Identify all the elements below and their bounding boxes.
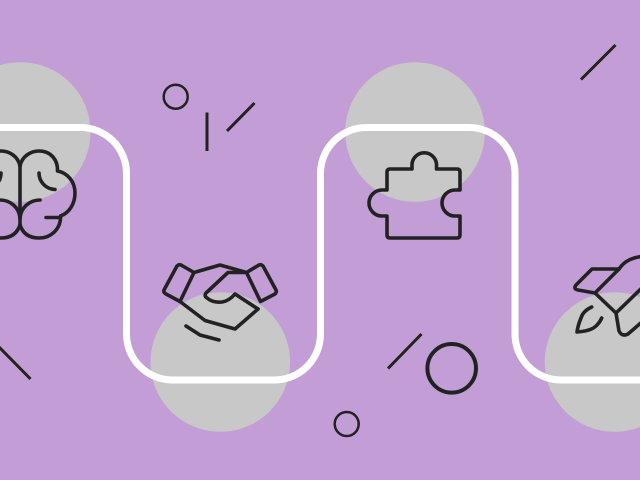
accent: large circle <box>427 344 476 393</box>
accent: vertical dash <box>206 112 208 151</box>
accent: diagonal dash centre <box>388 334 422 368</box>
icon: handshake <box>164 265 276 340</box>
icon: brain <box>0 151 75 238</box>
grey circles behind icons <box>0 62 640 432</box>
winding white path <box>0 127 640 380</box>
accent: diagonal dash top right <box>581 45 616 80</box>
accent: diagonal dash <box>227 103 254 131</box>
accent: small circle top <box>164 85 188 109</box>
accent: diagonal dash left <box>0 345 30 379</box>
icon: rocket <box>575 256 640 335</box>
accent: small circle bottom <box>335 412 359 436</box>
icon: puzzle piece <box>369 153 460 238</box>
